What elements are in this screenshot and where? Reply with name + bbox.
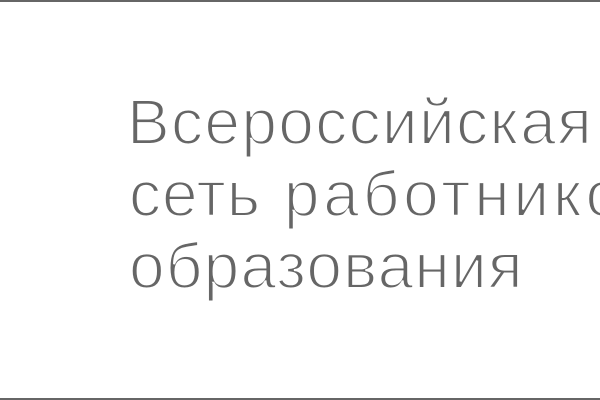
title line 3: образования: [129, 230, 524, 302]
bottom border: [0, 398, 600, 400]
title line 1: Всероссийская: [127, 86, 593, 158]
top border: [0, 0, 600, 2]
